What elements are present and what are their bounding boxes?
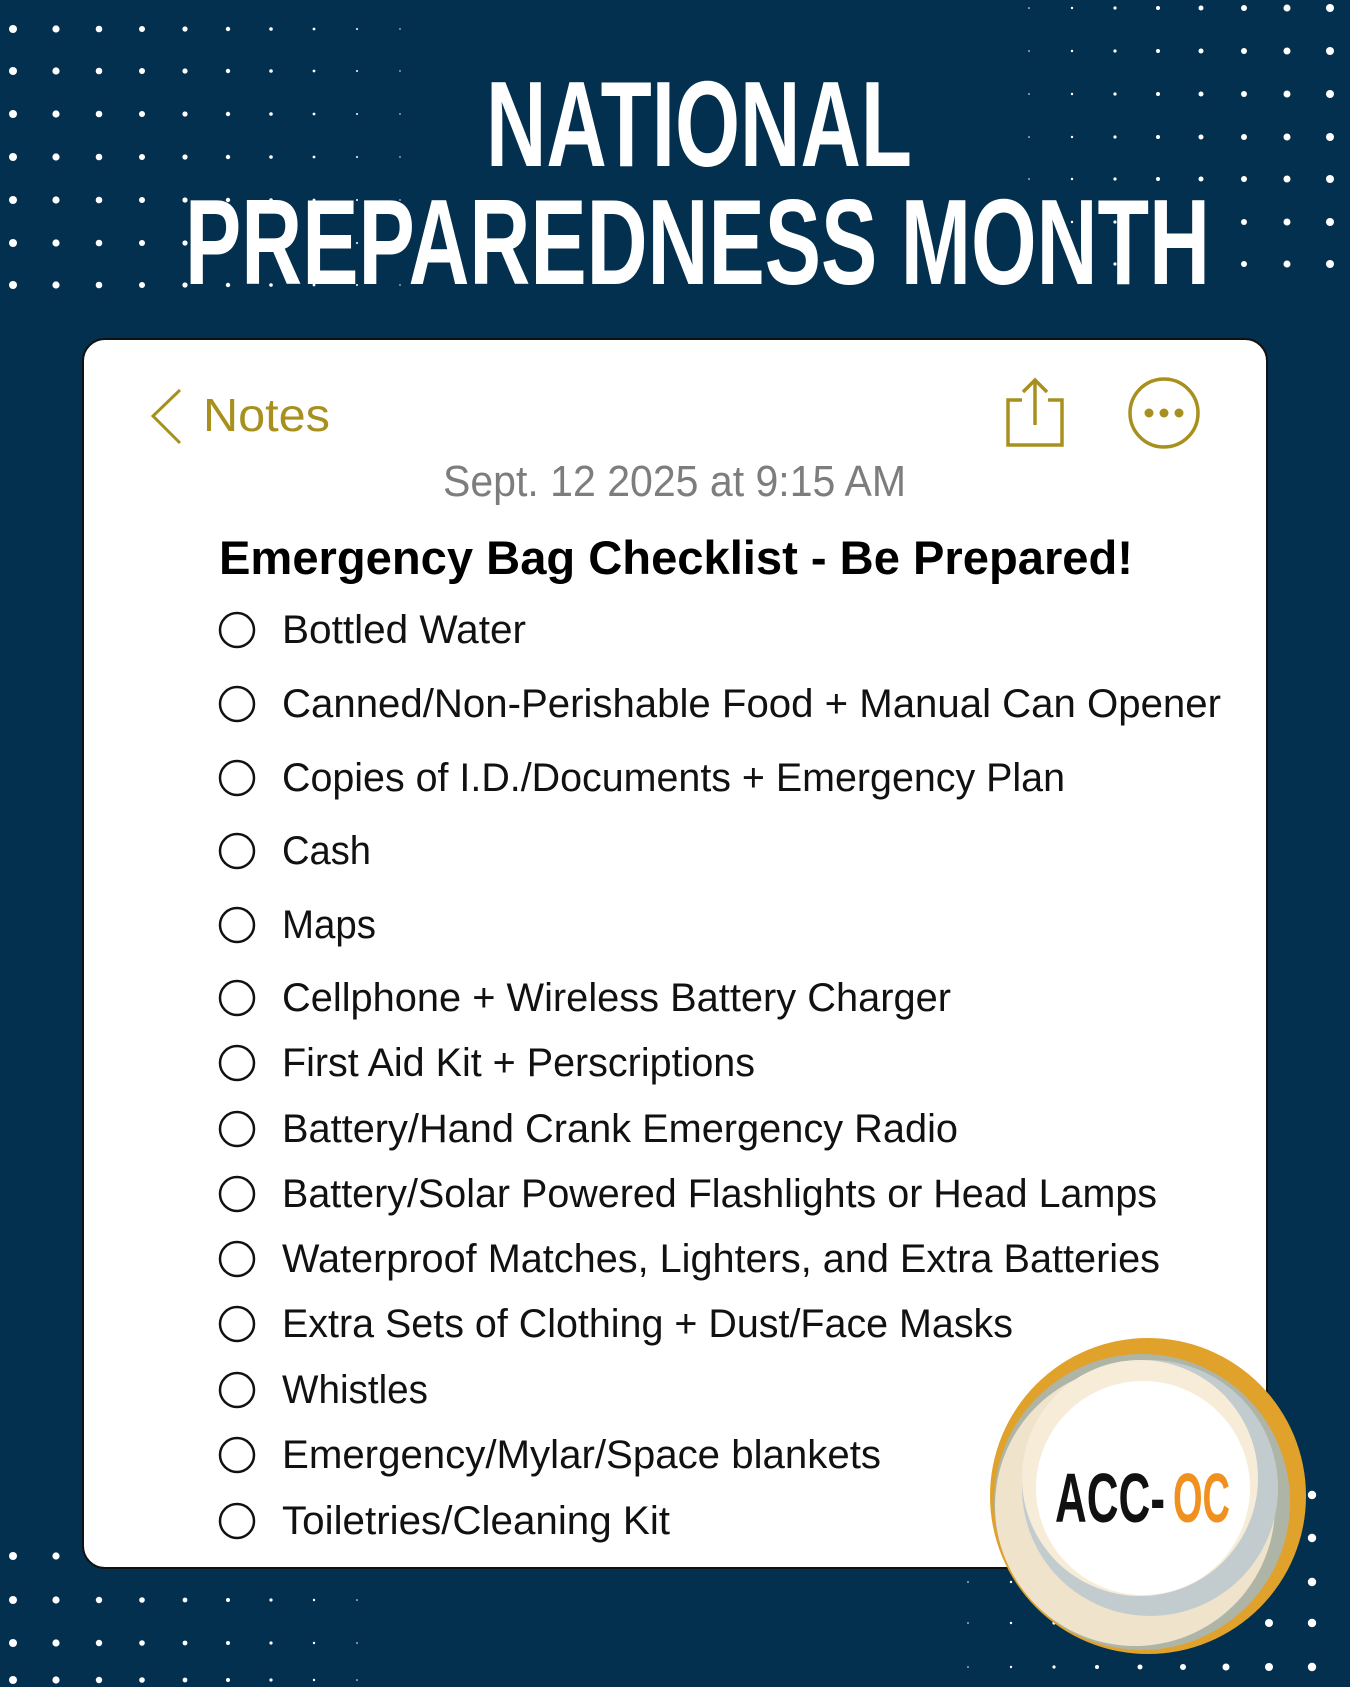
- checklist: Waterproof Matches, Lighters, and Extra Batteries: [282, 1237, 1160, 1281]
- checklist: First Aid Kit + Perscriptions: [282, 1041, 755, 1085]
- checklist: Cash: [282, 829, 371, 873]
- checklist: Battery/Solar Powered Flashlights or Head Lamps: [282, 1172, 1157, 1216]
- checklist: [220, 608, 1221, 1543]
- checklist: Whistles: [282, 1368, 428, 1412]
- checklist: Toiletries/Cleaning Kit: [282, 1499, 670, 1543]
- logo: ACC-OC: [990, 1338, 1306, 1654]
- checklist: Bottled Water: [282, 608, 526, 652]
- heading: Emergency Bag Checklist - Be Prepared!: [219, 531, 1133, 584]
- checklist: Battery/Hand Crank Emergency Radio: [282, 1107, 958, 1151]
- checklist: Emergency/Mylar/Space blankets: [282, 1433, 881, 1477]
- checklist: Maps: [282, 903, 376, 947]
- title: [185, 56, 1210, 310]
- notes label: Notes: [203, 389, 330, 441]
- checklist: Copies of I.D./Documents + Emergency Plan: [282, 756, 1065, 800]
- icon: back chevron: [153, 390, 180, 443]
- icon: share: [1008, 380, 1062, 445]
- panel: notes card: [83, 339, 1267, 1568]
- title: NATIONAL: [486, 56, 912, 192]
- logo: ACC-OC: OC: [1173, 1459, 1230, 1537]
- icon: more: [1130, 379, 1198, 447]
- checklist: Extra Sets of Clothing + Dust/Face Masks: [282, 1302, 1013, 1346]
- date: Sept. 12 2025 at 9:15 AM: [443, 457, 906, 506]
- logo: ACC-OC: ACC-: [1055, 1459, 1165, 1537]
- checklist: Canned/Non-Perishable Food + Manual Can Opener: [282, 682, 1221, 726]
- checklist: Cellphone + Wireless Battery Charger: [282, 976, 951, 1020]
